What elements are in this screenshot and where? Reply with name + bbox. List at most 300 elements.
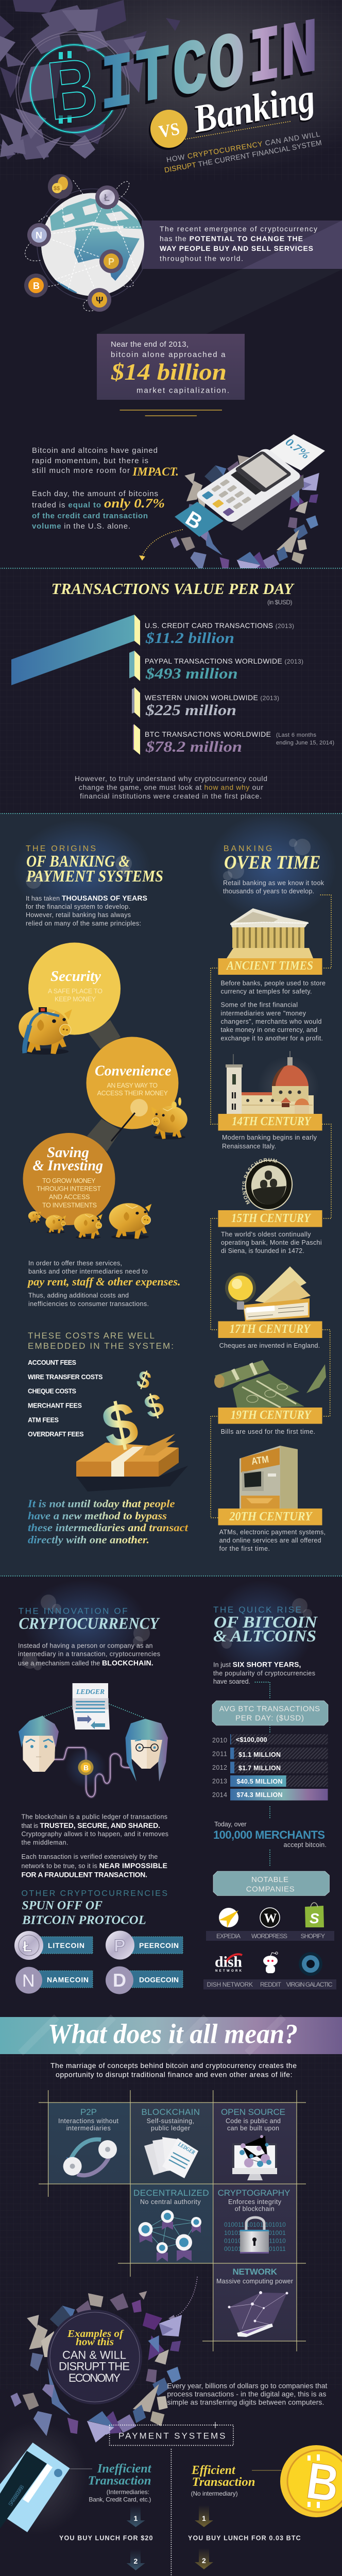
- heading: origins of banking: PAYMENT SYSTEMS: [26, 867, 163, 885]
- illustration: credit card: [0, 2421, 92, 2535]
- arrow: dotted to examples: [168, 2277, 197, 2321]
- list: embedded fees: OVERDRAFT FEES: [28, 1431, 84, 1438]
- bar: Western Union: WESTERN UNION WORLDWIDE (2013): [145, 693, 279, 702]
- chart header: notable companies: NOTABLE: [251, 1875, 288, 1884]
- cell: cryptography: CRYPTOGRAPHY: [218, 2188, 290, 2198]
- coin: litecoin: Ł: [23, 1938, 32, 1955]
- banking word: Banking: [189, 78, 318, 143]
- bar: Western Union: [132, 687, 279, 719]
- text block: room for impact: Each day, the amount of bitcoins: [32, 489, 158, 498]
- text: 15th century: di Siena, is founded in 1472.: [221, 1247, 304, 1255]
- bar: 2011: [212, 1748, 328, 1759]
- title letters ITCOIN: N: [280, 6, 318, 100]
- coin: litecoin: LITECOIN: [48, 1941, 84, 1950]
- panel: intro statement: throughout the world.: [160, 255, 243, 263]
- bar: 2011: $1.1 MILLION: [238, 1751, 281, 1758]
- stat: merchants: Today, over: [214, 1821, 247, 1828]
- cell: open source: [221, 2107, 285, 2180]
- section background: what it means: [0, 2054, 342, 2576]
- concept grid: [39, 2090, 306, 2351]
- cell: network: NETWORK: [233, 2267, 278, 2277]
- text: ancient times: Some of the first financial: [220, 1002, 298, 1009]
- circle: security: A SAFE PLACE TO: [48, 988, 102, 995]
- cell: P2P: Interactions without: [58, 2117, 119, 2125]
- icon: peercoin: P: [108, 257, 114, 267]
- label: ancient times: ANCIENT TIMES: [226, 959, 313, 973]
- panel: intro statement: has the POTENTIAL TO CHANGE THE: [160, 234, 303, 243]
- circle: security: [19, 943, 121, 1055]
- text: blockchain explanation: [22, 1813, 168, 1879]
- badge: can and will disrupt: Examples of: [67, 2328, 124, 2340]
- cell: open source: Code is public and: [226, 2117, 281, 2125]
- logo row: expedia wordpress shopify: EXPEDIA: [216, 1933, 241, 1940]
- receipt: 0.7%: [283, 435, 312, 462]
- icon: neon bitcoin emblem: [16, 32, 129, 145]
- bar: 2010: 2010: [212, 1737, 227, 1744]
- cell: cryptography: 001010 11010 001011: [224, 2245, 286, 2252]
- connectors between principles: [87, 1020, 121, 1151]
- cell: blockchain: BLOCKCHAIN: [141, 2107, 200, 2117]
- bar: 2013: $40.5 MILLION: [237, 1778, 282, 1785]
- label: 20th century: 20TH CENTURY: [229, 1510, 313, 1523]
- coin: litecoin: [14, 1931, 93, 1960]
- quote: bypass intermediaries: [27, 1497, 189, 1546]
- title letters ITCOIN: I: [246, 16, 278, 109]
- arrow: dotted: [139, 530, 182, 561]
- text: blockchain explanation: that is TRUSTED, SECURE, AND SHARED.: [22, 1821, 160, 1829]
- step 2: 2: [134, 2557, 138, 2565]
- heading: origins of banking: [26, 844, 163, 885]
- chart header: avg btc transactions: AVG BTC TRANSACTIONS: [219, 1704, 320, 1714]
- label: 17th century: [218, 1321, 322, 1338]
- list: embedded fees: ATM FEES: [28, 1417, 59, 1424]
- text: ancient times: intermediaries were "money: [220, 1010, 306, 1017]
- bar: 2011: 2011: [212, 1751, 227, 1758]
- badge: can and will disrupt: DISRUPT THE: [59, 2360, 130, 2373]
- panel: intro statement: [97, 221, 342, 334]
- text: ancient times: changers", merchants who would: [220, 1018, 322, 1025]
- circle: convenience: [87, 1037, 187, 1141]
- panel: intro statement: The recent emergence of cryptocurrency: [160, 225, 317, 233]
- text: ancient times: take money in one currency, and: [220, 1026, 317, 1033]
- text: marriage of concepts: The marriage of concepts behind bitcoin and cryptocurrency creates the: [50, 2061, 297, 2070]
- bar: 2014: 2014: [212, 1791, 227, 1799]
- flow: efficient transaction: [188, 2505, 321, 2576]
- step 1: [59, 2505, 153, 2542]
- illustration: ledger and two people: [19, 1683, 168, 1797]
- bar: PayPal: [129, 651, 303, 682]
- badge: can and will disrupt: how this: [76, 2336, 114, 2348]
- bar: US credit cards: U.S. CREDIT CARD TRANSACTIONS (2013): [145, 621, 294, 630]
- label: 14th century: 14TH CENTURY: [232, 1115, 312, 1128]
- text: every year: simple as transferring digits between computers.: [167, 2398, 324, 2406]
- panel: market capitalization: $14 billion: [111, 359, 227, 385]
- coin: dogecoin: [106, 1967, 183, 1994]
- bar: 2010: [212, 1734, 328, 1744]
- tagline: DISRUPT THE CURRENT FINANCIAL SYSTEM: [164, 138, 322, 174]
- text block: however: However, to truly understand why cryptocurrency could: [75, 774, 267, 783]
- illustration: dollars and money stack: $: [140, 1386, 168, 1426]
- panel: market capitalization: bitcoin alone approached a: [111, 350, 226, 359]
- bar: PayPal: $493 million: [145, 665, 238, 682]
- text: six short years: [213, 1660, 315, 1685]
- heading: rise of bitcoin: & ALTCOINS: [213, 1626, 316, 1645]
- text block: however: [75, 774, 267, 800]
- icon: gold coin stack: $$: [54, 185, 60, 192]
- icon: wand and pig: [111, 1097, 187, 1141]
- text: thousands of years: [26, 894, 147, 927]
- illustration: dollars and money stack: [76, 1365, 188, 1492]
- title: Bitcoin: [16, 6, 318, 145]
- text: service costs: banks and other intermediaries need to: [28, 1268, 148, 1275]
- logo row: expedia wordpress shopify: WORDPRESS: [251, 1933, 287, 1940]
- bar: 2012: 2012: [212, 1764, 227, 1771]
- person: male: [19, 1716, 59, 1772]
- illustration: cheques and light bulb: [225, 1266, 311, 1321]
- step 1: [188, 2505, 301, 2542]
- label: 19th century: 19TH CENTURY: [231, 1409, 312, 1422]
- heading: innovation of cryptocurrency: [19, 1606, 160, 1633]
- cell: cryptography: 101011 01100 101001: [224, 2229, 286, 2236]
- heading: banking over time: OVER TIME: [224, 852, 320, 873]
- list: embedded fees: WIRE TRANSFER COSTS: [28, 1374, 103, 1381]
- step 1: 1: [202, 2514, 206, 2522]
- text: blockchain intro: intermediary in a transaction, cryptocurrencies: [18, 1651, 160, 1658]
- bitcoin card: B: [181, 507, 206, 534]
- panel: market capitalization: Near the end of 2013,: [111, 340, 189, 349]
- stat: merchants: accept bitcoin.: [283, 1841, 327, 1849]
- section background: transactions: [0, 568, 342, 814]
- logo row: dish reddit virgin galactic: [203, 1952, 336, 1990]
- banner: what does it all mean: What does it all mean?: [48, 2018, 298, 2049]
- step 1: YOU BUY LUNCH FOR 0.03 BTC: [188, 2535, 301, 2542]
- bar: 2014: [212, 1789, 328, 1801]
- list: embedded fees: [28, 1331, 174, 1438]
- step 2: 2: [202, 2556, 206, 2565]
- title letters ITCOIN: [98, 6, 318, 135]
- chart header: notable companies: [213, 1871, 330, 1896]
- heading box: payment systems: [104, 2422, 233, 2445]
- column header: efficient transaction: (No intermediary): [191, 2490, 238, 2497]
- text: six short years: In just SIX SHORT YEARS,: [213, 1660, 301, 1669]
- column header: efficient transaction: Efficient: [191, 2464, 236, 2477]
- text: six short years: the popularity of cryptocurrencies: [213, 1670, 315, 1677]
- coin: namecoin: NAMECOIN: [47, 1975, 89, 1984]
- icon: litecoin: [95, 185, 119, 209]
- quote: bypass intermediaries: It is not until today that people: [27, 1497, 175, 1510]
- terminal body: [194, 447, 304, 531]
- icon: primecoin: Ψ: [96, 295, 104, 306]
- illustration: monte dei paschi seal: MONTIS PASCHORUM: [242, 1158, 277, 1205]
- bar chart: yearly btc volume: [212, 1734, 328, 1801]
- text block: room for impact: [32, 446, 179, 531]
- column header: inefficient transaction: (Intermediaries:: [107, 2488, 149, 2496]
- text: service costs: pay rent, staff & other expenses.: [27, 1275, 181, 1288]
- cell: cryptography: 010011 10101 101010: [224, 2221, 286, 2228]
- column header: inefficient transaction: Transaction: [88, 2474, 151, 2487]
- circle: security: KEEP MONEY: [55, 996, 96, 1003]
- title letters ITCOIN: O: [206, 22, 242, 116]
- circle: convenience: Convenience: [95, 1063, 171, 1079]
- circle: saving and investing: TO GROW MONEY: [42, 1177, 96, 1184]
- title letters ITCOIN: C: [173, 25, 208, 119]
- text: every year: process transactions - in the digital age, this is as: [167, 2390, 326, 2398]
- circle: saving and investing: AND ACCESS: [49, 1193, 90, 1200]
- logo row: dish reddit virgin galactic: NETWORK: [215, 1970, 242, 1973]
- heading box: payment systems: PAYMENT SYSTEMS: [118, 2431, 226, 2441]
- text block: room for impact: volume in the U.S. alone.: [32, 522, 130, 531]
- illustration: temple: [227, 908, 313, 958]
- text: 17th century: Cheques are invented in England.: [219, 1342, 320, 1349]
- bar: 2013: 2013: [212, 1778, 227, 1785]
- cell: open source: OPEN SOURCE: [221, 2107, 285, 2117]
- banner: what does it all mean: [0, 2017, 342, 2054]
- bar: US credit cards: $11.2 billion: [145, 630, 234, 647]
- text block: room for impact: only 0.7%: [104, 497, 165, 511]
- text: 20th century: [219, 1529, 326, 1552]
- text: 14th century: [222, 1134, 317, 1150]
- text: blockchain intro: Instead of having a person or company as an: [18, 1642, 153, 1650]
- label: 20th century: [218, 1509, 322, 1525]
- quote: bypass intermediaries: directly with one another.: [28, 1533, 149, 1546]
- bar: PayPal: PAYPAL TRANSACTIONS WORLDWIDE (2013): [145, 657, 303, 665]
- person: female: [126, 1719, 168, 1782]
- text block: room for impact: IMPACT.: [132, 465, 179, 478]
- illustration: dollars and money stack: $: [96, 1388, 144, 1462]
- icon: peercoin: [99, 249, 123, 273]
- text: ancient times: currency at temples for safety.: [220, 988, 312, 995]
- cell: decentralized: No central authority: [140, 2198, 201, 2206]
- step 1: YOU BUY LUNCH FOR $20: [59, 2535, 153, 2542]
- bar: 2012: [212, 1762, 328, 1773]
- step 2: [70, 2549, 152, 2576]
- circle: saving and investing: THROUGH INTEREST: [37, 1185, 101, 1193]
- cell: blockchain: Self-sustaining,: [147, 2117, 194, 2125]
- text: blockchain explanation: network to be true, so it is NEAR IMPOSSIBLE: [22, 1861, 167, 1870]
- text: 20th century: for the first time.: [219, 1545, 270, 1552]
- logo row: expedia wordpress shopify: S: [310, 1910, 319, 1926]
- text block: room for impact: Bitcoin and altcoins have gained: [32, 446, 158, 455]
- circle: saving and investing: [23, 1133, 151, 1239]
- list: embedded fees: ACCOUNT FEES: [28, 1359, 76, 1366]
- section background: header and intro: [0, 0, 342, 568]
- title letters ITCOIN: C: [170, 29, 205, 123]
- bar: BTC: $78.2 million: [145, 738, 242, 755]
- chart header: avg btc transactions: PER DAY: ($USD): [235, 1714, 304, 1722]
- icon: namecoin: N: [36, 230, 42, 241]
- logo row: expedia wordpress shopify: SHOPIFY: [301, 1933, 325, 1940]
- globe with coins: [24, 174, 148, 312]
- heading: spun off coins: OTHER CRYPTOCURRENCIES: [22, 1889, 167, 1898]
- text: marriage of concepts: opportunity to disrupt traditional finance and even other areas of life:: [56, 2070, 293, 2078]
- illustration: card terminal: [170, 434, 325, 578]
- icon: bitcoin: [24, 274, 48, 297]
- bitcoin card: [175, 502, 224, 537]
- icon: neon bitcoin emblem: B: [43, 40, 101, 137]
- text: 14th century: Modern banking begins in early: [222, 1134, 317, 1141]
- text: blockchain explanation: The blockchain is a public ledger of transactions: [22, 1813, 167, 1820]
- column header: efficient transaction: Transaction: [192, 2476, 255, 2489]
- circle: saving and investing: TO INVESTMENTS: [42, 1201, 97, 1209]
- text: blockchain explanation: Cryptography allows it to happen, and it removes: [22, 1831, 168, 1838]
- text: six short years: have soared.: [213, 1678, 250, 1685]
- decorative shards behind bitcoin emblem: [0, 0, 180, 160]
- bar: BTC: (Last 6 months: [276, 732, 316, 738]
- label: 15th century: 15TH CENTURY: [231, 1212, 312, 1225]
- heading: rise of bitcoin: OF BITCOIN: [214, 1613, 318, 1631]
- title letters ITCOIN: T: [135, 32, 170, 126]
- chart header: notable companies: COMPANIES: [246, 1885, 295, 1894]
- text: marriage of concepts: [50, 2061, 297, 2078]
- step 1: 1: [134, 2514, 138, 2522]
- text: thousands of years: It has taken THOUSANDS OF YEARS: [26, 894, 147, 902]
- icon: bitcoin coin: [78, 1760, 94, 1775]
- coin: dogecoin: D: [113, 1970, 126, 1991]
- circle: convenience: AN EASY WAY TO: [107, 1082, 158, 1089]
- ledger: [73, 1683, 110, 1730]
- cell: open source: can be built upon: [227, 2125, 279, 2132]
- title letters ITCOIN: I: [100, 39, 133, 132]
- icon: piggy bank with strap: [19, 1007, 72, 1055]
- cell: cryptography: Enforces integrity: [228, 2198, 282, 2206]
- timeline connector: [211, 895, 331, 1518]
- logo row: dish reddit virgin galactic: dish: [215, 1954, 242, 1970]
- cell: decentralized: [133, 2188, 209, 2262]
- stat: merchants: [213, 1821, 327, 1849]
- ledger: LEDGER: [76, 1688, 105, 1696]
- circle: saving and investing: Saving: [47, 1145, 89, 1161]
- illustration: ATM: ATM: [251, 1454, 269, 1467]
- illustration: credit card: 574786869976-8: [7, 2484, 26, 2507]
- text: ancient times: [220, 980, 326, 1042]
- heading: spun off coins: SPUN OFF OF: [22, 1899, 102, 1912]
- heading: rise of bitcoin: THE QUICK RISE: [213, 1605, 301, 1615]
- icon: primecoin: [88, 288, 111, 312]
- cell: network: [216, 2267, 293, 2337]
- text block: room for impact: of the credit card transaction: [32, 512, 148, 520]
- coin: namecoin: N: [22, 1971, 35, 1991]
- list: embedded fees: EMBEDDED IN THE SYSTEM:: [28, 1341, 174, 1351]
- label: 15th century: [218, 1210, 322, 1227]
- section background: origins of banking: [0, 812, 342, 1576]
- logo row: expedia wordpress shopify: W: [264, 1911, 277, 1925]
- icon: four pigs: [28, 1203, 151, 1239]
- cell: cryptography: of blockchain: [235, 2205, 275, 2212]
- icon: namecoin: [27, 223, 51, 247]
- cell: P2P: [58, 2107, 119, 2176]
- text: blockchain explanation: Each transaction is verified extensively by the: [22, 1853, 158, 1860]
- cell: cryptography: [218, 2188, 290, 2253]
- text: 20th century: ATMs, electronic payment systems,: [219, 1529, 326, 1536]
- heading: banking over time: [223, 844, 324, 895]
- heading: origins of banking: THE ORIGINS: [26, 844, 96, 853]
- coin: namecoin: [15, 1967, 93, 1994]
- bar: 2013: [212, 1775, 328, 1787]
- tagline: HOW CRYPTOCURRENCY CAN AND WILL: [166, 130, 320, 164]
- list: embedded fees: THESE COSTS ARE WELL: [28, 1331, 155, 1341]
- text: thousands of years: However, retail banking has always: [26, 911, 131, 919]
- heading: transactions value per day: (in $USD): [267, 599, 293, 606]
- bar: 2010: <$100,000: [236, 1736, 267, 1743]
- badge: can and will disrupt: ECONOMY: [69, 2371, 121, 2384]
- text: ancient times: exchange it to another for a profit.: [220, 1035, 323, 1042]
- vs coin: VS: [158, 120, 181, 142]
- text block: room for impact: still much more room for: [32, 466, 130, 475]
- bar chart: transaction values: [11, 615, 334, 755]
- banking word: Banking: [190, 76, 318, 141]
- text: service costs: In order to offer these services,: [28, 1260, 122, 1267]
- heading: spun off coins: BITCOIN PROTOCOL: [22, 1914, 146, 1927]
- coin: dogecoin: DOGECOIN: [139, 1975, 179, 1984]
- icon: bitcoin coin: [280, 2445, 342, 2517]
- quote: bypass intermediaries: have a new method to bypass: [28, 1510, 167, 1522]
- text: service costs: [27, 1260, 181, 1308]
- text: blockchain intro: use a mechanism called the BLOCKCHAIN.: [18, 1658, 153, 1667]
- logo row: dish reddit virgin galactic: VIRGIN GALACTIC: [286, 1981, 333, 1988]
- text: 14th century: Renaissance Italy.: [222, 1143, 276, 1150]
- text: 20th century: and online services are all offered: [219, 1537, 321, 1544]
- text: ancient times: Before banks, people used to store: [220, 980, 326, 987]
- bar: BTC: [133, 724, 334, 755]
- badge: can and will disrupt: CAN & WILL: [62, 2348, 126, 2362]
- bar: US credit cards: [11, 615, 294, 685]
- heading: innovation of cryptocurrency: THE INNOVATION OF: [19, 1606, 128, 1616]
- text: blockchain explanation: the middleman.: [22, 1839, 68, 1846]
- text: blockchain intro: [18, 1642, 160, 1667]
- heading: transactions value per day: [52, 580, 295, 606]
- text: blockchain explanation: FOR A FRAUDULENT TRANSACTION.: [22, 1871, 147, 1879]
- title letters ITCOIN: O: [209, 19, 245, 113]
- icon: gold coin stack: [48, 174, 73, 199]
- panel: market capitalization: market capitalization.: [136, 386, 229, 395]
- coin: peercoin: PEERCOIN: [139, 1941, 179, 1950]
- text block: however: financial institutions were created in the first place.: [80, 792, 262, 800]
- cell: P2P: intermediaries: [66, 2125, 111, 2132]
- text: 15th century: The world's oldest continually: [221, 1231, 311, 1238]
- subtitle: VS Banking: [149, 76, 322, 174]
- title letters ITCOIN: I: [98, 42, 131, 135]
- heading: origins of banking: OF BANKING &: [26, 852, 130, 870]
- circle: convenience: ACCESS THEIR MONEY: [97, 1090, 168, 1097]
- heading: rise of bitcoin: [213, 1605, 318, 1645]
- text block: room for impact: traded is equal to: [32, 501, 101, 510]
- column header: efficient transaction: [191, 2464, 281, 2497]
- heading: banking over time: Retail banking as we know it took: [223, 879, 324, 887]
- title letters ITCOIN: N: [278, 9, 316, 104]
- heading: banking over time: BANKING: [224, 844, 272, 853]
- list: embedded fees: MERCHANT FEES: [28, 1402, 82, 1410]
- coin: peercoin: P: [114, 1936, 126, 1956]
- illustration: florence cathedral: [226, 1051, 319, 1118]
- label: 17th century: 17TH CENTURY: [230, 1323, 311, 1336]
- column header: inefficient transaction: Inefficient: [97, 2462, 152, 2476]
- column header: inefficient transaction: [88, 2462, 152, 2503]
- icon: litecoin: Ł: [104, 193, 110, 203]
- blockchain cable: [55, 1748, 131, 1797]
- receipt: [266, 434, 325, 470]
- cell: decentralized: DECENTRALIZED: [133, 2188, 209, 2198]
- bar: BTC: ending June 15, 2014): [276, 740, 334, 746]
- illustration: rolled bills: [214, 1360, 326, 1408]
- flow: inefficient transaction: [46, 2505, 153, 2576]
- bar: Western Union: $225 million: [145, 702, 236, 719]
- text: thousands of years: for the financial system to develop.: [26, 903, 130, 910]
- cell: blockchain: LEDGER: [177, 2141, 196, 2156]
- bar: BTC: BTC TRANSACTIONS WORLDWIDE: [145, 730, 271, 738]
- bar: 2014: $74.3 MILLION: [237, 1791, 282, 1799]
- step 2: [188, 2548, 321, 2576]
- text: service costs: inefficiencies to consumer transactions.: [28, 1300, 149, 1308]
